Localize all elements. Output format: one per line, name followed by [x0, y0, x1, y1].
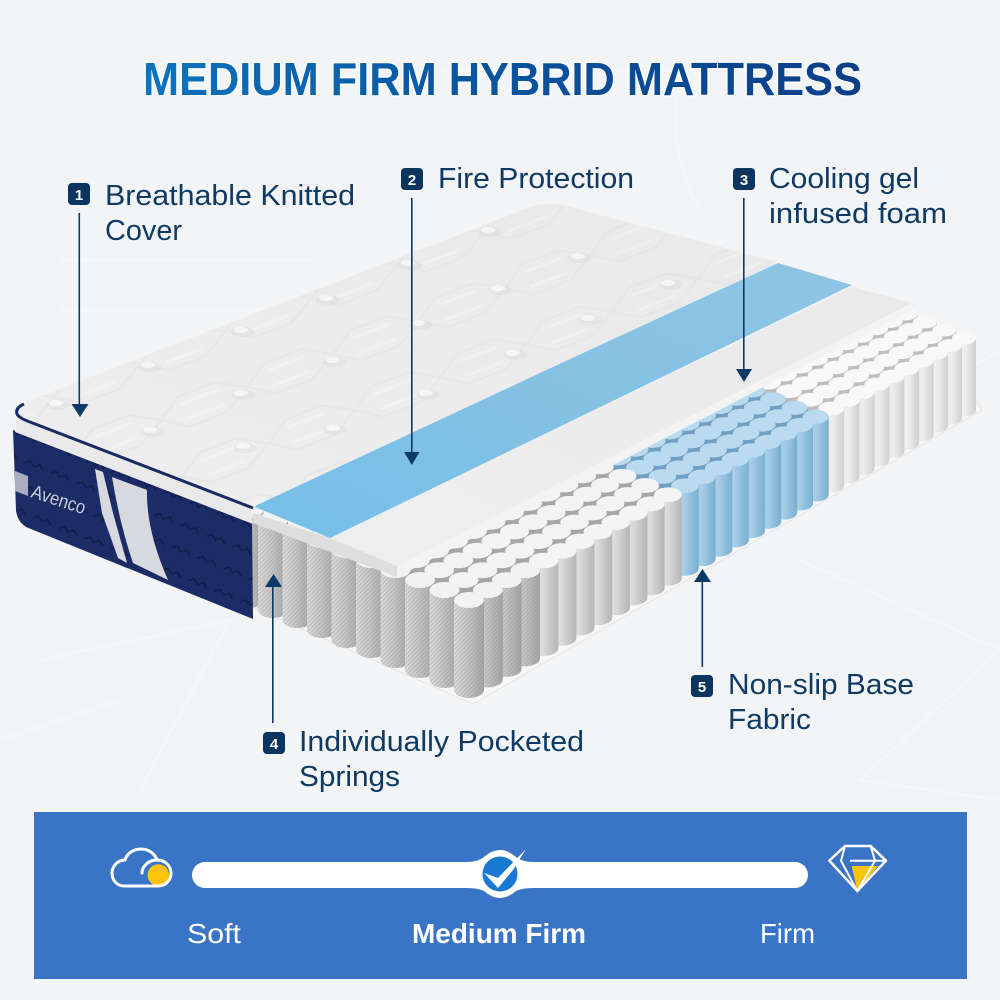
label 1: breathable knitted cover: Breathable Knitted — [105, 180, 355, 212]
label 3: cooling gel infused foam: infused foam — [769, 198, 947, 230]
label 1: breathable knitted cover: 1 — [75, 187, 83, 204]
firmness panel — [34, 812, 967, 979]
icon: diamond — [829, 846, 886, 891]
label 3: cooling gel infused foam: Cooling gel — [769, 163, 919, 195]
label 3: cooling gel infused foam — [733, 163, 947, 230]
arrow 4 — [265, 574, 282, 723]
label: soft: Soft — [187, 918, 241, 949]
label 5: non-slip base fabric: Non-slip Base — [728, 669, 914, 701]
logo mark — [15, 471, 28, 496]
panel stripes — [95, 469, 127, 563]
pocketed springs: main block — [380, 308, 976, 698]
logo wordmark: Avenco — [28, 482, 88, 519]
arrow 5 — [694, 569, 711, 667]
title: MEDIUM FIRM HYBRID MATTRESS — [143, 53, 862, 105]
arrow 2 — [404, 198, 420, 465]
label 1: breathable knitted cover — [68, 180, 355, 247]
label 4: individually pocketed springs: Springs — [299, 761, 400, 793]
label 2: fire protection: Fire Protection — [438, 163, 634, 195]
label 5: non-slip base fabric: Fabric — [728, 704, 811, 736]
icon: cloud — [112, 849, 171, 886]
slider marker — [466, 849, 534, 898]
arrow 1 — [72, 213, 88, 417]
label 3: cooling gel infused foam: 3 — [740, 172, 748, 189]
label 4: individually pocketed springs: Individually Pocketed — [299, 726, 584, 758]
label: medium firm: Medium Firm — [412, 918, 586, 949]
white foam layer — [253, 287, 912, 577]
label 2: fire protection: 2 — [408, 172, 416, 189]
cover tufts — [46, 227, 682, 453]
slider track — [192, 862, 808, 888]
label 5: non-slip base fabric: 5 — [698, 679, 706, 696]
label: firm: Firm — [760, 918, 815, 949]
label 4: individually pocketed springs: 4 — [270, 736, 279, 753]
blue gel foam layer — [255, 263, 852, 538]
label 5: non-slip base fabric — [691, 669, 914, 736]
cover piping — [17, 404, 253, 508]
knitted cover — [17, 204, 778, 507]
mattress illustration — [13, 204, 982, 704]
label 1: breathable knitted cover: Cover — [105, 215, 182, 247]
label 4: individually pocketed springs — [263, 726, 584, 793]
base fabric — [250, 400, 982, 704]
pocketed springs: left side — [234, 502, 386, 658]
arrow 3 — [736, 198, 752, 382]
panel wide stripe — [112, 477, 168, 580]
pillow top band — [15, 414, 253, 524]
side panel — [13, 430, 253, 619]
